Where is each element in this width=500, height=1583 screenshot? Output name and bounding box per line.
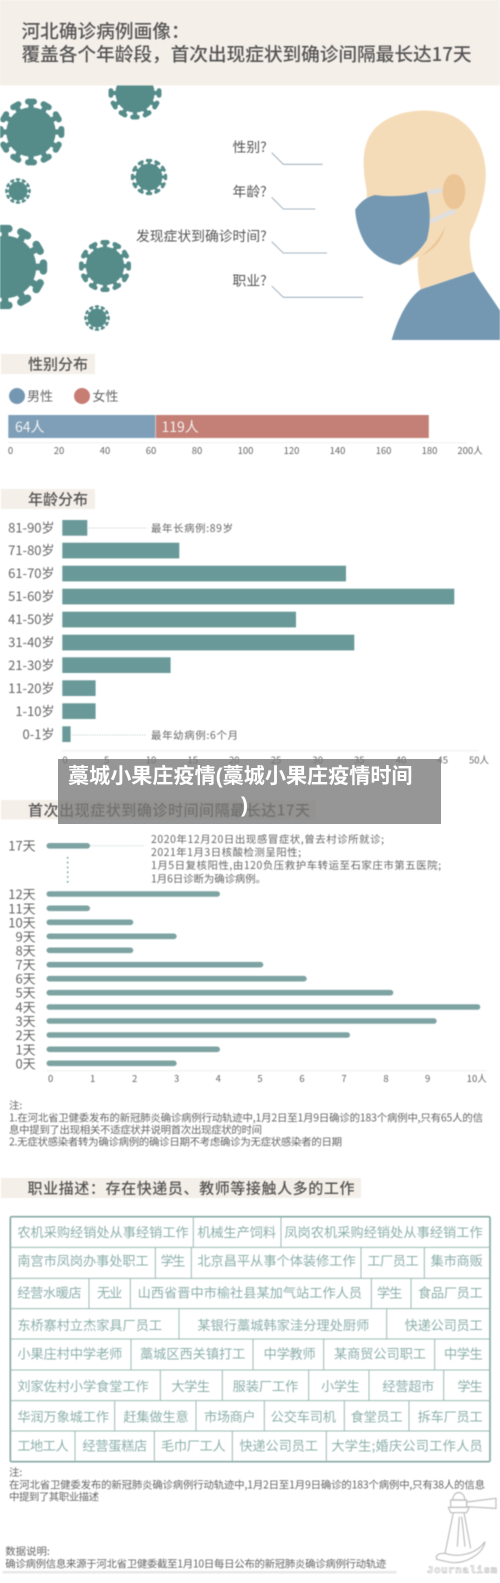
axis: age: 0	[62, 752, 68, 766]
bar: 10天	[8, 912, 133, 931]
data source note: 确诊病例信息来源于河北省卫健委截至1月10日每日公布的新冠肺炎确诊病例行动轨迹	[5, 1555, 387, 1570]
axis: interval: 0	[48, 1071, 53, 1085]
bar: 9天: 9天	[15, 926, 36, 945]
row 4	[17, 1309, 483, 1339]
row 6: 学生	[457, 1376, 483, 1395]
axis: interval: 7	[341, 1071, 347, 1085]
axis: age: 15	[187, 752, 198, 766]
heading: symptom to diagnosis interval: 首次出现症状到确诊时间间隔最长达17天	[28, 800, 310, 820]
footnote: occupation table	[9, 1464, 485, 1504]
row 7: 公交车司机	[271, 1407, 336, 1426]
axis: interval	[47, 1071, 487, 1085]
axis: gender: 120	[284, 443, 299, 457]
data source note	[2, 1543, 396, 1574]
row 3: 学生	[377, 1282, 402, 1301]
dotted axis break	[68, 846, 145, 884]
row 1: 农机采购经销处从事经销工作	[17, 1222, 189, 1241]
bar: 0天: 0天	[15, 1053, 36, 1072]
axis: age: 35	[354, 752, 365, 766]
bar: 1-10岁: 1-10岁	[15, 701, 54, 720]
row 8: 工地工人	[17, 1435, 69, 1454]
footnote: occupation table: 注:	[9, 1464, 22, 1479]
row 6	[17, 1370, 483, 1401]
bar: 7天	[15, 955, 263, 974]
bar: 4天	[15, 997, 480, 1016]
bar: 6天: 6天	[15, 969, 36, 988]
heading: age distribution: 年龄分布	[28, 488, 88, 510]
axis: gender	[8, 443, 483, 457]
row 2: 南宫市凤岗办事处职工	[17, 1251, 149, 1270]
bar chart: interval days	[8, 836, 480, 1072]
bar: 17天: 17天	[8, 836, 36, 855]
row 7: 市场商户	[204, 1407, 256, 1426]
bar: 7天: 7天	[15, 955, 36, 974]
row 5: 某商贸公司职工	[334, 1343, 426, 1362]
axis: gender: 40	[100, 443, 110, 457]
axis: gender: 100	[238, 443, 253, 457]
stacked bar: gender: 119人	[162, 417, 199, 437]
heading: occupation description: 职业描述：存在快递员、教师等接触人多的工作	[28, 1178, 354, 1198]
row 3: 山西省晋中市榆社县某加气站工作人员	[138, 1282, 362, 1301]
row 1: 机械生产饲料	[197, 1222, 276, 1241]
heading: gender distribution: 性别分布	[28, 354, 88, 374]
bar: 1天	[15, 1039, 220, 1058]
footnote: interval chart	[9, 1097, 483, 1149]
legend: gender: 男性	[27, 386, 53, 405]
axis: interval: 4	[216, 1071, 221, 1085]
bar: 12天	[8, 884, 220, 903]
bar: 0-1岁: 0-1岁	[23, 724, 54, 743]
axis: age: 5	[104, 752, 109, 766]
bar: 51-60岁	[8, 586, 454, 605]
axis: gender: 0	[8, 443, 13, 457]
row 4: 某银行藁城韩家洼分理处厨师	[197, 1315, 369, 1334]
row 4: 快递公司员工	[405, 1315, 483, 1334]
title band: 河北确诊病例画像：	[22, 17, 190, 44]
row 7: 食堂员工	[351, 1407, 403, 1426]
bar: 3天: 3天	[15, 1011, 36, 1030]
bar: 41-50岁	[8, 609, 296, 628]
row 6: 刘家佐村小学食堂工作	[17, 1376, 149, 1395]
row 5: 小果庄村中学老师	[17, 1343, 122, 1362]
bar: 1-10岁	[15, 701, 96, 720]
row 2	[17, 1247, 483, 1278]
row 4: 东桥寨村立杰家具厂员工	[17, 1315, 162, 1334]
row 6: 大学生	[171, 1376, 210, 1395]
row 1: 凤岗农机采购经销处从事经销工作	[284, 1222, 483, 1241]
logo wordmark: Journalism	[427, 1565, 497, 1577]
row 5: 藁城区西关镇打工	[140, 1343, 245, 1362]
bar: 51-60岁: 51-60岁	[8, 586, 54, 605]
illustration: masked person	[355, 110, 500, 340]
row 2: 集市商贩	[431, 1251, 483, 1270]
row 7: 华润万象城工作	[17, 1407, 109, 1426]
axis: gender: 140	[330, 443, 345, 457]
axis: gender: 160	[376, 443, 391, 457]
heading: age distribution	[1, 488, 95, 510]
row 8	[17, 1431, 483, 1462]
footnote: interval chart: 息中提到了出现相关不适症状并说明首次出现症状的时间	[9, 1121, 262, 1136]
bar: 21-30岁	[8, 655, 171, 674]
bar: 6天	[15, 969, 307, 988]
bar: 5天	[15, 983, 393, 1002]
row 8: 毛巾厂工人	[161, 1435, 226, 1454]
row 3	[17, 1278, 483, 1309]
callout: longest interval case timeline: 2021年1月3日核酸检测呈阳性;	[151, 844, 301, 859]
row 1	[17, 1217, 483, 1247]
axis: interval: 10人	[467, 1071, 487, 1085]
bar: 81-90岁	[8, 518, 87, 536]
axis: interval: 1	[90, 1071, 95, 1085]
axis: age: 40	[396, 752, 406, 766]
axis: age	[62, 751, 490, 766]
row 3: 无业	[97, 1282, 122, 1301]
bar: 31-40岁: 31-40岁	[8, 632, 54, 651]
bar: 11-20岁	[8, 678, 96, 697]
axis: gender: 80	[192, 443, 202, 457]
axis: interval: 5	[257, 1071, 263, 1085]
callout: youngest case: 最年幼病例:6个月	[151, 727, 238, 742]
title band	[0, 0, 500, 86]
row 8: 大学生;婚庆公司工作人员	[331, 1435, 483, 1454]
bar: 31-40岁	[8, 632, 354, 651]
bar: 5天: 5天	[15, 983, 36, 1002]
bar: 81-90岁: 81-90岁	[8, 518, 54, 536]
overlay banner: 藁城小果庄疫情(藁城小果庄疫情时间	[68, 765, 413, 788]
row 7: 赶集做生意	[123, 1407, 189, 1426]
question labels with leader lines: 性别?	[233, 136, 267, 156]
bar: 61-70岁: 61-70岁	[8, 563, 54, 582]
bar: 17天	[8, 836, 90, 855]
axis: age: 10	[146, 752, 156, 766]
question labels with leader lines: 发现症状到确诊时间?	[136, 225, 267, 245]
row 5	[17, 1339, 483, 1370]
icon: lighthouse logo	[436, 1492, 496, 1563]
legend: gender	[9, 386, 119, 405]
footnote: occupation table: 在河北省卫健委发布的新冠肺炎确诊病例行动轨迹中,1月2日至1月9日确诊的183个病例中,只有38人的信息	[9, 1476, 485, 1491]
bar: 41-50岁: 41-50岁	[8, 609, 54, 628]
row 8: 经营蛋糕店	[82, 1435, 147, 1454]
callout: longest interval case timeline: 1月6日诊断为确诊病例。	[151, 870, 266, 885]
bar: 4天: 4天	[15, 997, 36, 1016]
footnote: occupation table: 中提到了其职业描述	[9, 1489, 99, 1504]
bar: 11天: 11天	[8, 898, 36, 917]
legend: gender: 女性	[92, 386, 119, 405]
stacked bar: gender	[8, 415, 429, 438]
bar: 21-30岁: 21-30岁	[8, 655, 54, 674]
axis: age: 45	[437, 752, 448, 766]
bar: 1天: 1天	[15, 1039, 36, 1058]
bar: 0天	[15, 1053, 177, 1072]
question labels with leader lines: 年龄?	[233, 180, 267, 200]
axis: age: 20	[229, 752, 240, 766]
row 3: 食品厂员工	[418, 1282, 483, 1301]
axis: interval: 9	[425, 1071, 430, 1085]
bar: 2天: 2天	[15, 1025, 36, 1044]
bar: 12天: 12天	[8, 884, 36, 903]
axis: age: 25	[271, 752, 281, 766]
row 2: 学生	[161, 1251, 185, 1270]
callout: oldest case: 最年长病例:89岁	[151, 520, 233, 535]
footnote: interval chart: 1.在河北省卫健委发布的新冠肺炎确诊病例行动轨迹中,1月2日至1月9日确诊的183个病例中,只有65人的信	[9, 1109, 483, 1124]
axis: gender: 200人	[457, 443, 483, 457]
callout: longest interval case timeline: 1月5日复核阳性,由120负压救护车转运至石家庄市第五医院;	[151, 857, 441, 872]
axis: age: 30	[312, 752, 323, 766]
row 2: 工厂员工	[367, 1251, 419, 1270]
question labels with leader lines	[136, 136, 363, 297]
bar: 11-20岁: 11-20岁	[8, 678, 54, 697]
axis: interval: 2	[132, 1071, 137, 1085]
footnote: interval chart: 2.无症状感染者转为确诊病例的确诊日期不考虑确诊为无症状感染者的日期	[9, 1134, 342, 1149]
axis: interval: 8	[383, 1071, 389, 1085]
bar: 8天	[15, 940, 133, 959]
row 5: 中学教师	[264, 1343, 316, 1362]
row 3: 经营水暖店	[17, 1282, 82, 1301]
bar: 0-1岁	[23, 724, 71, 743]
bar: 10天: 10天	[8, 912, 36, 931]
heading: gender distribution	[1, 354, 95, 374]
overlay banner: )	[241, 794, 248, 817]
axis: interval: 3	[174, 1071, 179, 1085]
bar: 71-80岁	[8, 540, 179, 559]
row 6: 经营超市	[382, 1376, 434, 1395]
data source note: 数据说明:	[5, 1543, 50, 1558]
callout: longest interval case timeline	[151, 831, 441, 885]
axis: gender: 180	[422, 443, 437, 457]
axis: gender: 20	[54, 443, 64, 457]
question labels with leader lines: 职业?	[233, 270, 267, 290]
row 6: 服装厂工作	[233, 1376, 298, 1395]
bar: 3天	[15, 1011, 437, 1030]
row 7: 拆车厂员工	[418, 1407, 483, 1426]
footnote: interval chart: 注:	[9, 1097, 22, 1112]
bar: 9天	[15, 926, 177, 945]
axis: gender: 60	[146, 443, 156, 457]
icon: virus cluster	[0, 67, 167, 331]
bar: 11天	[8, 898, 90, 917]
bar: 8天: 8天	[15, 940, 36, 959]
axis: interval: 6	[299, 1071, 305, 1085]
axis: age: 50人	[469, 752, 490, 766]
overlay banner	[58, 759, 441, 824]
row 6: 小学生	[321, 1376, 360, 1395]
bar chart: age distribution	[8, 518, 454, 743]
bar: 71-80岁: 71-80岁	[8, 540, 54, 559]
row 5: 中学生	[444, 1343, 483, 1362]
row 2: 北京昌平从事个体装修工作	[197, 1251, 356, 1270]
stacked bar: gender: 64人	[15, 417, 45, 437]
callout: longest interval case timeline: 2020年12月20日出现感冒症状,曾去村诊所就诊;	[151, 831, 384, 846]
row 8: 快递公司员工	[239, 1435, 318, 1454]
bar: 61-70岁	[8, 563, 346, 582]
row 7	[17, 1401, 483, 1431]
table: occupations	[10, 1217, 490, 1462]
bar: 2天	[15, 1025, 350, 1044]
title band: 覆盖各个年龄段，首次出现症状到确诊间隔最长达17天	[22, 40, 472, 67]
